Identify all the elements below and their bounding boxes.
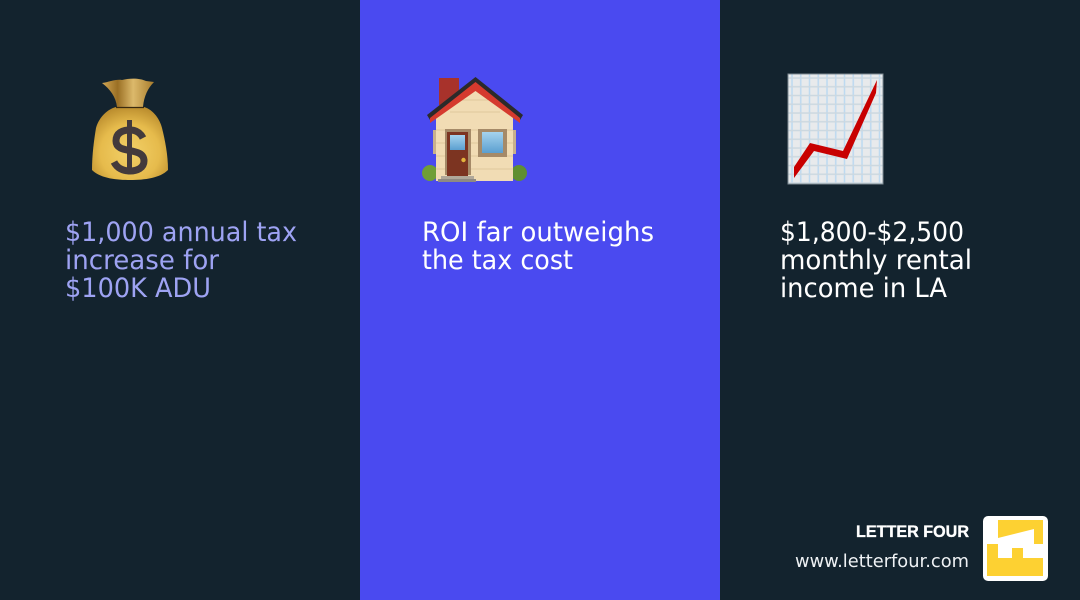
panel: right background <box>720 0 1080 600</box>
panel: middle background <box>360 0 720 600</box>
text: middle caption: the tax cost <box>422 245 573 276</box>
window <box>478 129 507 157</box>
roof <box>427 77 523 120</box>
brand name: LETTER FOUR <box>856 522 969 541</box>
steps <box>441 176 474 179</box>
chimney <box>439 78 459 105</box>
panel: left background <box>0 0 360 600</box>
icon: money bag <box>92 79 168 180</box>
door <box>445 129 471 175</box>
text: left caption <box>65 217 297 304</box>
bushes <box>422 165 438 181</box>
text: right caption: monthly rental <box>780 245 972 276</box>
shutters <box>433 130 437 154</box>
walls <box>436 87 513 181</box>
text: middle caption: ROI far outweighs <box>422 217 654 248</box>
text: right caption: income in LA <box>780 273 947 304</box>
icon: house <box>422 77 527 182</box>
logo <box>983 516 1048 581</box>
text: left caption: $1,000 annual tax <box>65 217 297 248</box>
text: right caption: $1,800-$2,500 <box>780 217 964 248</box>
dollar sign on bag <box>114 120 144 172</box>
icon: rising chart <box>788 74 883 184</box>
text: middle caption <box>422 217 654 276</box>
text: right caption <box>780 217 972 304</box>
text: left caption: $100K ADU <box>65 273 211 304</box>
text: left caption: increase for <box>65 245 220 276</box>
website url: www.letterfour.com <box>795 552 969 572</box>
